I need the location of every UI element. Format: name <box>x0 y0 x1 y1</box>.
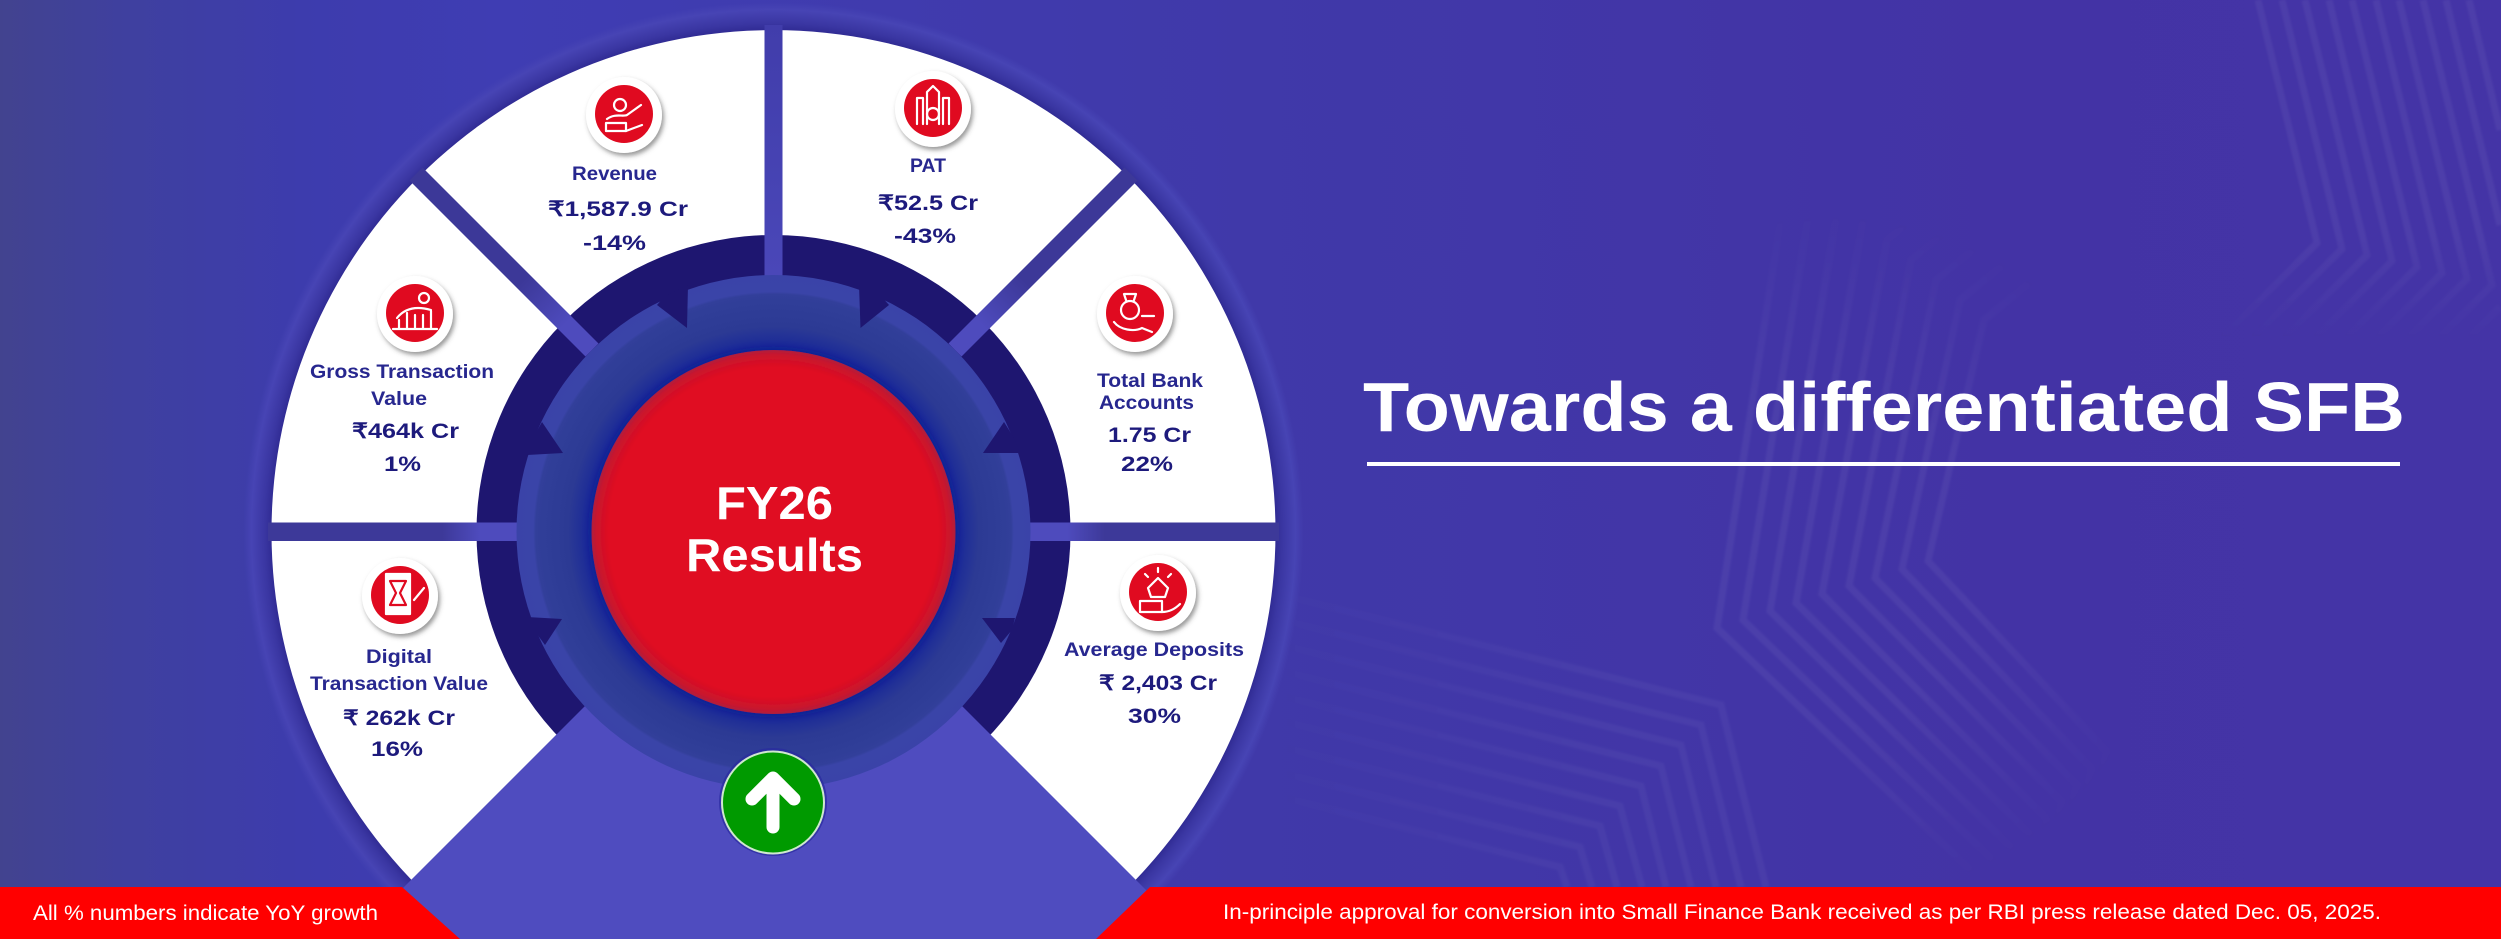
icon: bar growth <box>377 276 453 352</box>
panel: gross transaction value <box>310 276 494 476</box>
icon: PAT <box>895 71 971 147</box>
panel: average deposits <box>1064 555 1244 728</box>
GTV change: 1% <box>384 453 421 476</box>
DTV label: Transaction Value <box>310 674 488 695</box>
revenue value: ₹1,587.9 Cr <box>548 198 688 221</box>
icon: deposit hand <box>1120 555 1196 631</box>
background line pattern: centre <box>1717 70 2107 887</box>
green up arrow <box>719 748 827 856</box>
icon: phone with pen <box>362 558 438 634</box>
DTV value: ₹ 262k Cr <box>343 707 455 730</box>
centre red circle: Results <box>686 529 863 581</box>
wheel outer band <box>243 2 1304 939</box>
revenue label: Revenue <box>572 164 657 185</box>
background line pattern: bottom centre <box>1270 592 1766 887</box>
GTV label: Gross Transaction <box>310 362 494 383</box>
accounts change: 22% <box>1121 453 1173 476</box>
panel: PAT <box>878 71 978 248</box>
segment spokes <box>268 25 1279 541</box>
deposits label: Average Deposits <box>1064 640 1244 661</box>
icon: money bag in hand <box>1097 276 1173 352</box>
deposits change: 30% <box>1128 705 1181 728</box>
dark inner ring <box>476 235 1070 829</box>
results wheel <box>243 2 1304 939</box>
DTV label: Digital <box>366 647 432 668</box>
heading: Towards a differentiated SFB <box>1363 368 2405 446</box>
PAT change: -43% <box>894 225 956 248</box>
panel: total bank accounts <box>1097 276 1203 476</box>
accounts label: Total Bank <box>1097 371 1203 392</box>
white segment disc <box>272 30 1276 939</box>
right footnote ribbon: In-principle approval for conversion into Small Finance Bank received as per RBI press release dated Dec. 05, 2025. <box>1223 901 2381 924</box>
gear notches <box>527 285 1020 645</box>
PAT value: ₹52.5 Cr <box>878 192 978 215</box>
accounts label <box>1097 371 1203 414</box>
GTV label <box>310 362 494 410</box>
revenue change: -14% <box>583 232 646 255</box>
PAT label: PAT <box>910 156 946 177</box>
GTV value: ₹464k Cr <box>352 420 459 443</box>
icon: revenue hand <box>586 77 662 153</box>
background line pattern: top right <box>2217 0 2500 398</box>
DTV label <box>310 647 488 695</box>
panel: digital transaction value <box>310 558 488 761</box>
centre title: FY26 <box>716 477 833 529</box>
bottom wedge <box>390 518 1157 939</box>
accounts value: 1.75 Cr <box>1108 424 1191 447</box>
heading underline <box>1367 462 2400 466</box>
accounts label: Accounts <box>1099 393 1194 414</box>
centre red circle <box>592 350 956 714</box>
gear ring <box>516 275 1030 789</box>
deposits value: ₹ 2,403 Cr <box>1099 672 1217 695</box>
left footnote ribbon <box>0 887 460 939</box>
DTV change: 16% <box>371 738 423 761</box>
panel: revenue <box>548 77 688 255</box>
right footnote ribbon <box>1096 887 2501 939</box>
left footnote ribbon: All % numbers indicate YoY growth <box>33 902 378 925</box>
GTV label: Value <box>371 389 427 410</box>
